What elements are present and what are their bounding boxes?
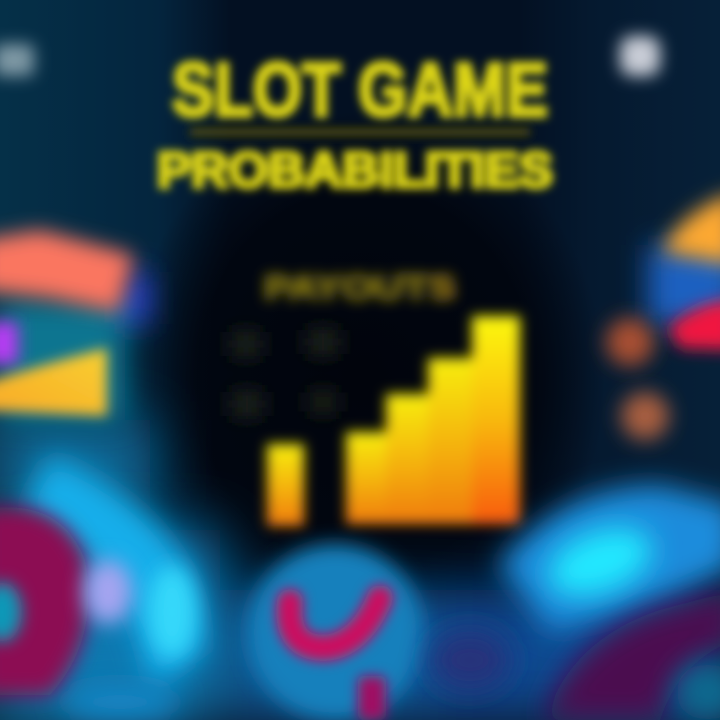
icon: cyan blob: [498, 485, 720, 632]
icon: maroon blob: [0, 507, 88, 695]
icon: blue circle: [247, 544, 423, 720]
panel: right illustration: [606, 192, 720, 440]
icon: salmon card: [0, 230, 134, 312]
panel: bottom illustration: [0, 455, 720, 720]
icon: purple accent: [0, 322, 18, 364]
icon: orange dot one: [606, 318, 654, 366]
icon: maroon shape: [545, 590, 720, 720]
cyan arc: [20, 455, 205, 690]
icon: top right light: [620, 36, 660, 76]
icon: orange dot two: [621, 392, 669, 440]
icon: magenta letter U: [289, 598, 380, 648]
icon: yellow wave: [0, 348, 107, 416]
panel: left illustration: [0, 230, 150, 510]
title: PROBABILITIES: [157, 142, 553, 198]
title divider: [190, 128, 530, 136]
title: [157, 48, 553, 198]
icon: cyan inner spot: [0, 582, 22, 642]
icon: teal corner: [676, 664, 720, 720]
icon: orange arc: [662, 192, 720, 265]
dim chart markers: [232, 330, 338, 416]
subtitle: PAYOUTS: [264, 269, 456, 307]
title: SLOT GAME: [172, 48, 548, 133]
icon: lavender spot: [84, 560, 132, 624]
icon: dark purple spot: [430, 630, 510, 690]
icon: red shape: [668, 300, 720, 350]
icon: cyan highlight right: [539, 515, 661, 609]
icon: top left light: [0, 44, 34, 76]
bar chart: [267, 316, 520, 526]
icon: cyan highlight: [148, 566, 196, 658]
icon: cyan bottom glow: [60, 684, 180, 720]
icon: magenta stem: [358, 676, 386, 720]
